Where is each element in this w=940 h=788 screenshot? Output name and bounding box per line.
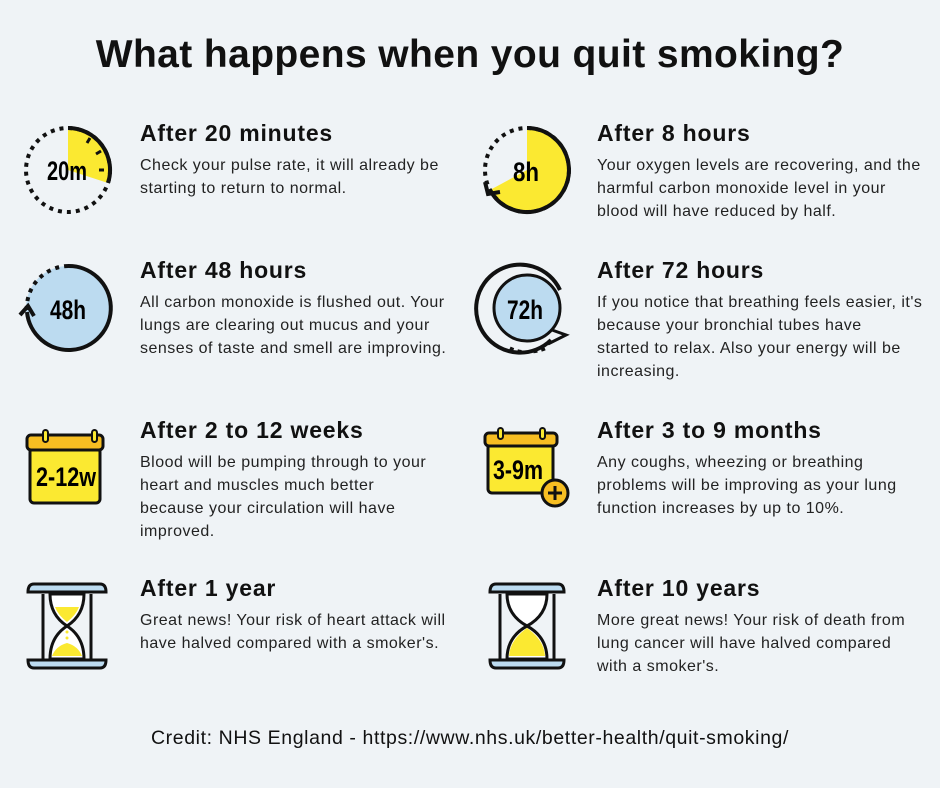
item: after 48 hours: All carbon monoxide is flushed out. Your [140, 294, 445, 311]
text: 20m [47, 156, 87, 186]
icon: hourglass 1 year [26, 582, 108, 670]
item: after 8 hours: Your oxygen levels are recovering, and the [597, 157, 921, 174]
item: after 2 to 12 weeks [140, 417, 426, 540]
item: after 72 hours: increasing. [597, 363, 680, 380]
icon: 8h clock [483, 126, 571, 214]
item: after 72 hours: because your bronchial tubes have [597, 317, 862, 334]
item: after 10 years: More great news! Your risk of death from [597, 612, 905, 629]
item: after 3 to 9 months: After 3 to 9 months [597, 417, 822, 443]
item: after 72 hours: If you notice that breathing feels easier, it's [597, 294, 922, 311]
item: after 72 hours: started to relax. Also your energy will be [597, 340, 901, 357]
item: after 10 years: After 10 years [597, 575, 760, 601]
item: after 8 hours: harmful carbon monoxide level in your [597, 180, 886, 197]
item: after 3 to 9 months [597, 417, 897, 517]
icon: calendar 2-12w [26, 429, 104, 504]
item: after 2 to 12 weeks: improved. [140, 523, 215, 540]
title: What happens when you quit smoking? [96, 33, 844, 76]
text: 8h [513, 157, 539, 187]
item: after 10 years: with a smoker's. [597, 658, 719, 675]
item: after 48 hours: lungs are clearing out mucus and your [140, 317, 430, 334]
icon: 72h clock [474, 262, 570, 355]
item: after 48 hours: After 48 hours [140, 257, 307, 283]
item: after 3 to 9 months: Any coughs, wheezing or breathing [597, 454, 863, 471]
item: after 2 to 12 weeks: heart and muscles much better [140, 477, 374, 494]
icon: 48h clock [18, 264, 113, 352]
text: 2-12w [36, 462, 97, 492]
item: after 72 hours [597, 257, 922, 380]
text: 72h [507, 295, 543, 325]
item: after 8 hours [597, 120, 921, 220]
credit: Credit: NHS England - https://www.nhs.uk/better-health/quit-smoking/ [151, 727, 789, 749]
item: after 1 year: Great news! Your risk of heart attack will [140, 612, 446, 629]
item: after 8 hours: After 8 hours [597, 120, 751, 146]
item: after 3 to 9 months: problems will be improving as your lung [597, 477, 897, 494]
item: after 2 to 12 weeks: because your circulation will have [140, 500, 395, 517]
text: 48h [50, 295, 86, 325]
item: after 48 hours: senses of taste and smell are improving. [140, 340, 446, 357]
icon: hourglass 10 years [488, 582, 566, 670]
item: after 2 to 12 weeks: Blood will be pumping through to your [140, 454, 426, 471]
item: after 20 minutes: After 20 minutes [140, 120, 333, 146]
item: after 1 year: After 1 year [140, 575, 276, 601]
item: after 10 years: lung cancer will have halved compared [597, 635, 891, 652]
icon: 20m clock [24, 126, 112, 214]
item: after 2 to 12 weeks: After 2 to 12 weeks [140, 417, 364, 443]
item: after 1 year [140, 575, 446, 652]
icon: calendar 3-9m [484, 427, 570, 508]
item: after 20 minutes [140, 120, 439, 197]
item: after 1 year: have halved compared with a smoker's. [140, 635, 439, 652]
item: after 20 minutes: Check your pulse rate, it will already be [140, 157, 439, 174]
item: after 20 minutes: starting to return to normal. [140, 180, 347, 197]
item: after 10 years [597, 575, 905, 675]
text: 3-9m [493, 455, 543, 485]
item: after 48 hours [140, 257, 446, 357]
item: after 8 hours: blood will have reduced by half. [597, 203, 836, 220]
item: after 3 to 9 months: function increases by up to 10%. [597, 500, 844, 517]
item: after 72 hours: After 72 hours [597, 257, 764, 283]
